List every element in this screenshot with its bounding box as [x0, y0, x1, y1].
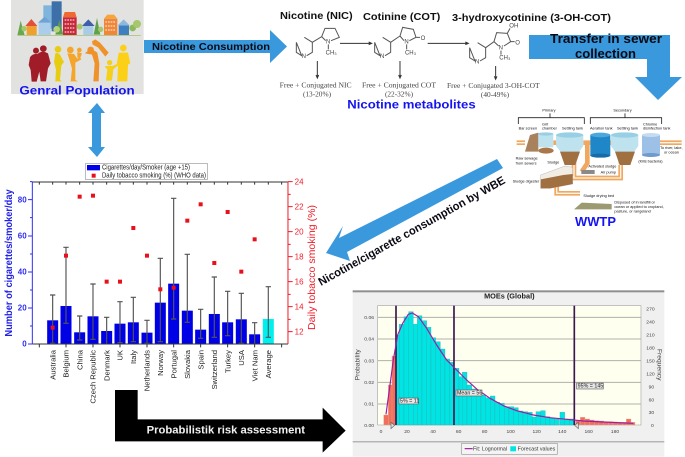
left axis tick labels — [18, 195, 27, 349]
country labels: Denmark — [102, 350, 111, 381]
bars — [47, 284, 274, 344]
probability axis title: Probability — [354, 349, 361, 380]
frequency axis labels: 270 — [646, 307, 655, 313]
right axis tick labels: 16 — [295, 277, 304, 286]
molecule: cotinine: N — [380, 54, 384, 60]
diagram brackets and labels: Sludge digester — [513, 179, 540, 183]
pipes — [517, 143, 682, 193]
bar chart: cigarettes per smoker by country — [4, 163, 318, 404]
molecule: 3-hydroxycotinine: CH₃ — [499, 55, 511, 61]
frequency axis labels: 0 — [651, 423, 654, 429]
value axis labels — [380, 429, 619, 435]
country labels: Switzerland — [210, 350, 219, 390]
country labels: Belgium — [62, 350, 71, 378]
chart frame and ticks — [28, 182, 293, 347]
left axis tick labels: 0 — [22, 340, 27, 349]
country labels: Turkey — [223, 350, 232, 373]
histogram legend — [462, 443, 557, 454]
right axis tick labels — [295, 177, 304, 336]
country labels: Norway — [156, 350, 165, 376]
right axis tick labels: 24 — [295, 177, 304, 186]
label: cotinine excretion share: Free + Conjugated COT — [362, 80, 437, 89]
heading: 3-hydroxycotinine: 3-hydroxycotinine (3-OH-COT) — [452, 13, 611, 24]
diagram brackets and labels: ocean or applied to cropland, — [614, 205, 664, 209]
arrow: nicotine consumption: Nicotine Consumption — [152, 41, 270, 53]
callout: 95 percent: 95% = 145 — [578, 384, 603, 390]
diagram brackets and labels: Secondary — [613, 109, 632, 113]
bars: forecast values — [396, 312, 574, 425]
arrow: 3-hydroxycotinine excretion — [494, 66, 497, 79]
label: nicotine excretion share: (13-20%) — [303, 89, 332, 98]
error bars — [50, 198, 271, 344]
frequency axis labels: 150 — [646, 358, 655, 364]
arrow: transfer in sewer collection: collection — [575, 47, 636, 61]
right axis tick labels: 18 — [295, 252, 304, 261]
diagram brackets and labels: Sludge — [547, 161, 559, 165]
frequency axis labels: 60 — [649, 397, 654, 403]
arrow: nicotine to cotinine — [340, 42, 372, 45]
heading: nicotine metabolites: Nicotine metabolites — [347, 97, 476, 111]
left axis tick labels: 60 — [18, 232, 27, 241]
plot area — [378, 306, 641, 425]
country labels: Czech Republic — [89, 350, 98, 404]
label: nicotine excretion share: Free + Conjugated NIC — [280, 80, 352, 89]
country labels: USA — [237, 349, 246, 366]
arrow: transfer in sewer collection: Transfer in sewer — [550, 32, 662, 46]
diagram brackets and labels — [513, 109, 683, 214]
label: 3-hydroxycotinine excretion share: Free + Conjugated 3-OH-COT — [447, 81, 540, 90]
molecule: cotinine — [375, 27, 426, 60]
callout: mean: Mean = 56 — [457, 391, 482, 397]
arrow: nicotine/cigarette consumption by WBE: Nicotine/cigarette consumption by WBE — [317, 175, 508, 289]
diagram brackets and labels: Disposed of in landfill or — [614, 200, 656, 204]
value axis labels: 160 — [584, 429, 593, 435]
country labels: Slovakia — [183, 349, 192, 379]
value axis labels: 120 — [532, 429, 541, 435]
probability axis labels: 0.00 — [364, 423, 374, 429]
country labels: Portugal — [169, 350, 178, 379]
tanks — [525, 132, 660, 209]
right axis title: Daily tobacco smoking (%) — [307, 205, 318, 330]
scatter: daily tobacco smoking — [51, 194, 257, 330]
molecule: cotinine: N — [404, 40, 409, 46]
frequency axis labels: 240 — [646, 319, 655, 325]
probability axis labels: 0.01 — [364, 402, 374, 408]
country labels: China — [75, 349, 84, 370]
heading: WWTP: WWTP — [575, 215, 617, 229]
panel: general population — [11, 0, 144, 98]
country labels: UK — [116, 349, 125, 361]
histogram title: MOEs (Global) — [484, 291, 535, 300]
diagram brackets and labels: To river, lake, — [660, 146, 683, 150]
diagram brackets and labels: Chlorine — [643, 122, 657, 126]
frequency axis labels: 210 — [646, 332, 655, 338]
percentile lines — [396, 306, 574, 425]
arrow: cotinine to 3-hydroxycotinine — [428, 42, 468, 45]
frequency axis title: Frequency — [655, 349, 662, 381]
bars: tail values — [384, 356, 635, 425]
country labels: Spain — [196, 350, 205, 370]
histogram legend: Forecast values — [518, 447, 556, 453]
frequency axis labels: 30 — [649, 410, 654, 416]
histogram: MOEs distribution — [353, 290, 664, 457]
probability axis labels: 0.02 — [364, 380, 374, 386]
label: cotinine excretion share: (22-32%) — [385, 89, 414, 98]
heading: general population: Genral Population — [19, 84, 135, 98]
arrow: cotinine excretion — [399, 61, 401, 78]
heading: cotinine: Cotinine (COT) — [363, 12, 440, 23]
diagram brackets and labels: Raw sewage — [516, 156, 538, 160]
right axis tick labels: 14 — [295, 302, 304, 311]
molecule: 3-hydroxycotinine: OH — [509, 23, 518, 29]
left axis title: Number of cigarettes/smoker/day — [4, 189, 15, 337]
probability axis labels: 0.03 — [364, 358, 374, 364]
value axis labels: 80 — [482, 429, 488, 435]
probability axis labels: 0.04 — [364, 337, 374, 343]
value axis labels: 140 — [558, 429, 567, 435]
diagram brackets and labels: or ocean — [664, 150, 679, 154]
country labels: Italy — [129, 350, 138, 364]
frequency axis labels: 120 — [646, 371, 655, 377]
molecule: 3-hydroxycotinine: N — [499, 45, 503, 51]
value axis labels: 100 — [506, 429, 515, 435]
country labels: Netherlands — [143, 350, 152, 391]
country labels: Australia — [48, 349, 57, 380]
frequency axis labels — [646, 307, 655, 429]
arrow: population to chart — [88, 103, 105, 157]
molecule: 3-hydroxycotinine: N — [475, 59, 479, 65]
arrow: probabilistic risk assessment: Probabilistik risk assessment — [147, 424, 305, 436]
icon: family silhouettes — [29, 39, 130, 82]
molecule: 3-hydroxycotinine — [470, 23, 520, 65]
diagram brackets and labels: Aeration tank — [590, 126, 613, 130]
right axis tick labels: 20 — [295, 227, 304, 236]
diagram brackets and labels: Sludge drying bed — [583, 194, 614, 198]
diagram brackets and labels: pasture, or rangeland — [614, 210, 651, 214]
value axis labels: 20 — [404, 429, 410, 435]
fit curve: lognormal — [386, 313, 633, 423]
arrow: transfer in sewer collection — [529, 32, 682, 100]
molecule: nicotine: N — [326, 40, 330, 46]
arrow: probabilistic risk assessment — [115, 390, 346, 453]
histogram legend: Fit: Lognormal — [473, 447, 507, 453]
molecule: nicotine — [296, 28, 339, 60]
diagram brackets and labels: Primary — [542, 109, 556, 113]
diagram brackets and labels: from sewers — [516, 161, 537, 165]
probability axis labels: 0.06 — [364, 315, 374, 321]
left axis tick labels: 40 — [18, 268, 27, 277]
left axis tick labels: 80 — [18, 195, 27, 204]
diagram brackets and labels: chamber — [542, 126, 558, 130]
diagram brackets and labels: Settling tank — [617, 126, 638, 130]
panel: WWTP diagram — [513, 109, 683, 229]
diagram brackets and labels: (Kills bacteria) — [638, 160, 663, 164]
diagram brackets and labels: Settling tank — [562, 126, 583, 130]
heading: nicotine: Nicotine (NIC) — [280, 11, 353, 22]
molecule: nicotine: CH₃ — [326, 51, 337, 57]
right axis tick labels: 12 — [295, 327, 304, 336]
molecule: cotinine: O — [421, 36, 426, 42]
country labels: Viet Nam — [250, 350, 259, 381]
left axis tick labels: 20 — [18, 304, 27, 313]
callout: 5 percent: 5% = 11 — [400, 399, 419, 405]
arrow: nicotine excretion — [316, 61, 319, 78]
frequency axis labels: 90 — [649, 384, 654, 390]
diagram brackets and labels: Bar screen — [519, 126, 537, 130]
panel: nicotine metabolites — [280, 11, 611, 111]
value axis labels: 40 — [430, 429, 436, 435]
chart legend: Daily tobacco smoking (%) (WHO data) — [102, 172, 206, 179]
diagram brackets and labels: disinfection tank — [643, 126, 671, 130]
arrow: nicotine consumption — [144, 30, 287, 63]
chart legend: Cigarettes/day/Smoker (age +15) — [102, 165, 190, 172]
molecule: 3-hydroxycotinine: O — [515, 41, 520, 47]
country labels: Average — [264, 350, 273, 378]
molecule: cotinine: CH₃ — [405, 51, 417, 57]
frequency axis labels: 180 — [646, 345, 655, 351]
right axis tick labels: 22 — [295, 202, 304, 211]
chart legend — [85, 163, 207, 179]
diagram brackets and labels: Air pump — [601, 171, 616, 175]
molecule: nicotine: N — [302, 54, 306, 60]
value axis labels: 60 — [456, 429, 462, 435]
probability axis labels — [364, 315, 374, 429]
icon: city buildings — [17, 1, 141, 36]
value axis labels: 180 — [611, 429, 619, 435]
diagram brackets and labels: Grit — [542, 122, 549, 126]
country labels — [48, 349, 273, 404]
percentile markers — [391, 422, 578, 429]
diagram brackets and labels: Activated sludge — [588, 164, 616, 168]
label: 3-hydroxycotinine excretion share: (40-49%) — [481, 90, 510, 99]
value axis labels: 0 — [380, 429, 383, 435]
